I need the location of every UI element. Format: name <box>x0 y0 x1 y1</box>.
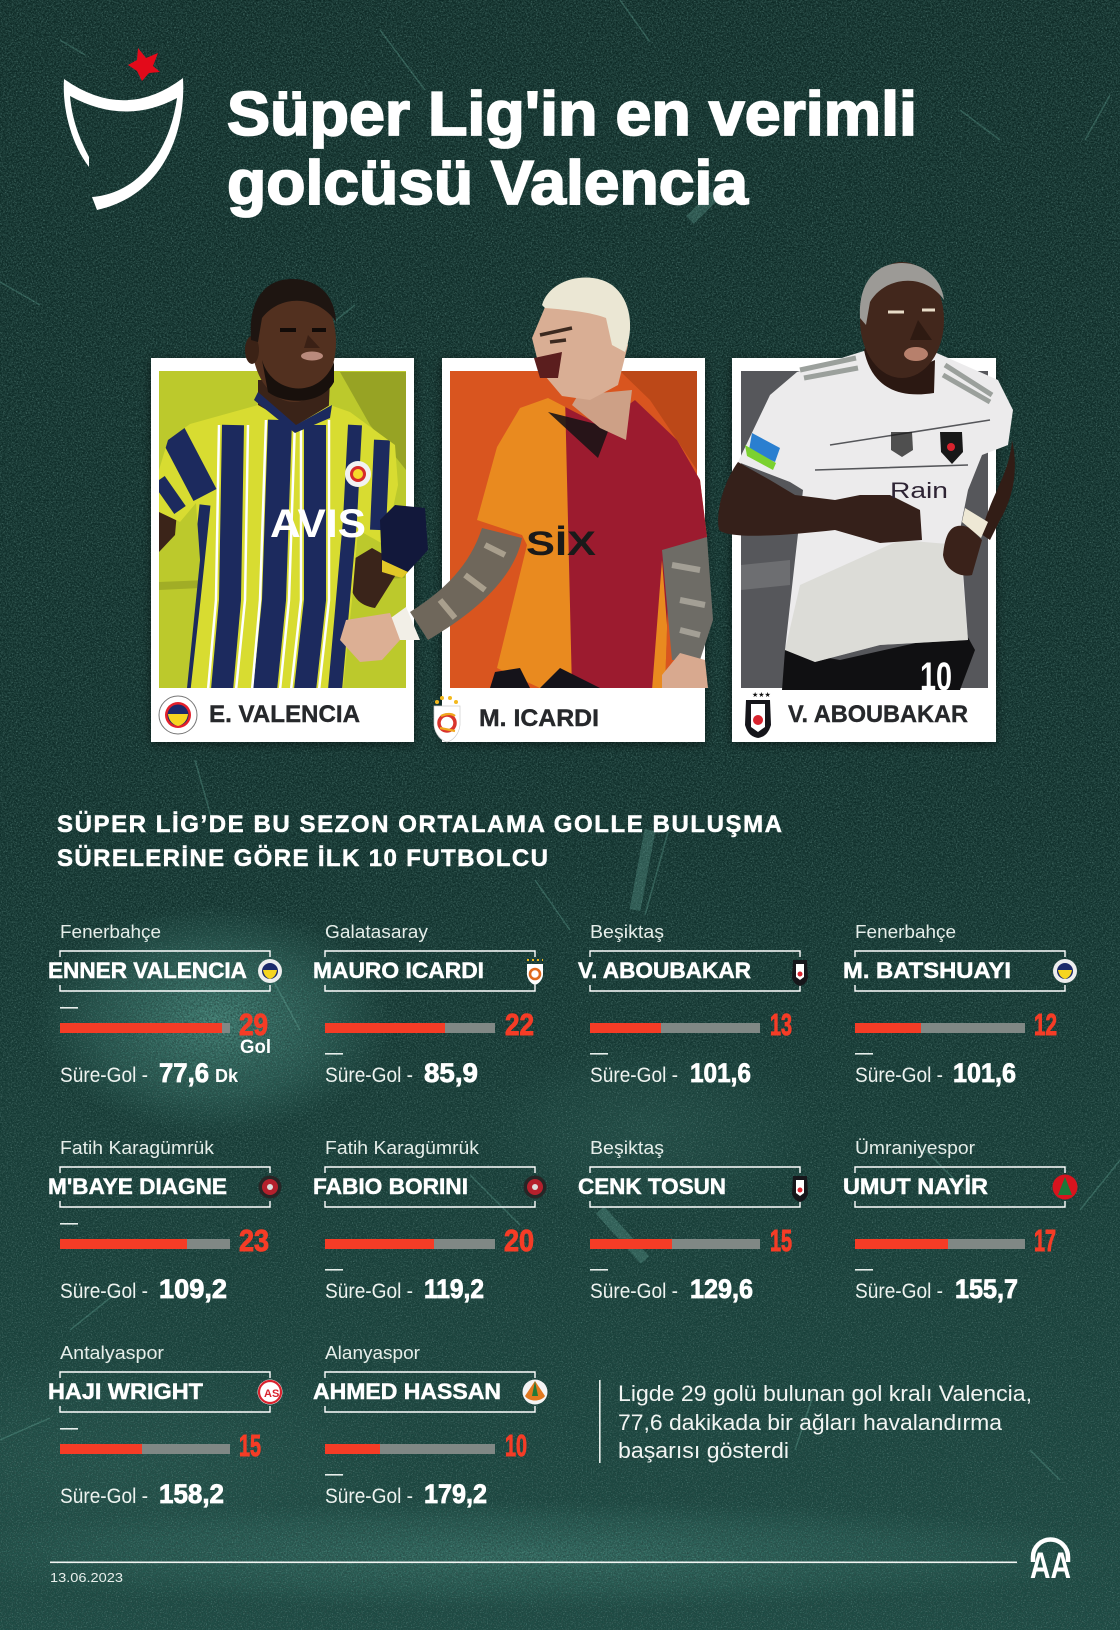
player card: Icardi: SİX <box>526 525 596 563</box>
player: Cenk Tosun <box>578 1138 808 1304</box>
icon: Aboubakar figure <box>718 262 1015 699</box>
player: Fabio Borini <box>313 1138 546 1304</box>
date: 13.06.2023 <box>50 1570 123 1585</box>
player: Enner Valencia: 29 <box>239 1007 268 1042</box>
title: golcüsü Valencia <box>227 149 749 218</box>
player card: Valencia <box>150 279 428 742</box>
player: Fabio Borini: 119,2 <box>424 1274 484 1304</box>
player: Enner Valencia: Süre-Gol - <box>60 1064 148 1087</box>
icon: AA logo <box>1030 1540 1071 1586</box>
icon: Aboubakar figure: 10 <box>920 655 952 699</box>
icon: Icardi head <box>572 390 632 440</box>
player: V. Aboubakar: 13 <box>770 1007 792 1042</box>
icon: Aboubakar head <box>860 262 944 378</box>
player: M. Batshuayi: M. BATSHUAYI <box>843 958 1011 983</box>
badge: Fenerbahçe <box>159 696 197 734</box>
icon: tattooed arm left <box>410 528 522 640</box>
player: Fabio Borini: Fatih Karagümrük <box>325 1138 480 1158</box>
player: M. Batshuayi: Fenerbahçe <box>855 922 956 942</box>
player: Umut Nayir: 17 <box>1034 1223 1056 1258</box>
player: Enner Valencia <box>48 922 282 1088</box>
player: Ahmed Hassan: 179,2 <box>424 1479 487 1509</box>
player: Umut Nayir: 155,7 <box>955 1274 1018 1304</box>
player: V. Aboubakar: Beşiktaş <box>590 922 664 942</box>
footer line <box>50 1562 1017 1563</box>
section heading <box>57 811 782 872</box>
callout: başarısı gösterdi <box>618 1438 789 1463</box>
player: M'Baye Diagne <box>48 1138 282 1304</box>
player: M. Batshuayi: Süre-Gol - <box>855 1064 943 1087</box>
player: Ahmed Hassan: Süre-Gol - <box>325 1485 413 1508</box>
player: M. Batshuayi <box>843 922 1077 1088</box>
player: Enner Valencia: Fenerbahçe <box>60 922 161 942</box>
player: Mauro Icardi: MAURO ICARDI <box>313 958 484 983</box>
player: Cenk Tosun: 15 <box>770 1223 792 1258</box>
icon: tattooed arm right <box>662 537 713 660</box>
icon: glove <box>380 505 428 575</box>
player: M. Batshuayi: 101,6 <box>953 1058 1016 1088</box>
label: E. VALENCIA <box>209 701 360 728</box>
player: Umut Nayir <box>843 1138 1078 1304</box>
callout <box>599 1380 1032 1463</box>
player: Mauro Icardi <box>313 922 543 1088</box>
player: Ahmed Hassan: 10 <box>505 1428 527 1463</box>
player: M. Batshuayi: 12 <box>1034 1007 1057 1042</box>
player: M'Baye Diagne: Fatih Karagümrük <box>60 1138 215 1158</box>
player: Cenk Tosun: Süre-Gol - <box>590 1280 678 1303</box>
badge: Beşiktaş <box>745 691 771 738</box>
player: Ahmed Hassan <box>313 1343 548 1509</box>
icon: Icardi shirt <box>470 395 715 690</box>
player: Haji Wright <box>48 1343 282 1509</box>
section heading: SÜPER LİG’DE BU SEZON ORTALAMA GOLLE BULUŞMA <box>57 811 782 838</box>
player: M'Baye Diagne: Süre-Gol - <box>60 1280 148 1303</box>
player: V. Aboubakar: V. ABOUBAKAR <box>578 958 751 983</box>
player: Fabio Borini: 20 <box>504 1223 534 1258</box>
player: Cenk Tosun: Beşiktaş <box>590 1138 664 1158</box>
icon: Valencia figure <box>150 279 428 690</box>
league logo <box>64 48 183 210</box>
player: Mauro Icardi: Galatasaray <box>325 922 428 942</box>
player: Fabio Borini: Süre-Gol - <box>325 1280 413 1303</box>
player: Enner Valencia: Dk <box>215 1066 239 1086</box>
badge: Galatasaray <box>434 696 460 742</box>
player: Cenk Tosun: CENK TOSUN <box>578 1174 726 1199</box>
player: Mauro Icardi: 22 <box>505 1007 534 1042</box>
player card: Icardi <box>340 278 715 742</box>
player: M'Baye Diagne: 23 <box>239 1223 269 1258</box>
player card: Aboubakar <box>718 262 1015 742</box>
player: Haji Wright: HAJI WRIGHT <box>48 1379 204 1404</box>
player: V. Aboubakar: 101,6 <box>690 1058 751 1088</box>
player: M'Baye Diagne: 109,2 <box>159 1274 227 1304</box>
section heading: SÜRELERİNE GÖRE İLK 10 FUTBOLCU <box>57 845 548 872</box>
player: Ahmed Hassan: Alanyaspor <box>325 1343 420 1363</box>
icon: AA logo: AA <box>1030 1545 1071 1586</box>
player: Enner Valencia: ENNER VALENCIA <box>48 958 247 983</box>
player: M'Baye Diagne: M'BAYE DIAGNE <box>48 1174 227 1199</box>
player: Haji Wright: Süre-Gol - <box>60 1485 148 1508</box>
player: Haji Wright: 15 <box>239 1428 261 1463</box>
callout: 77,6 dakikada bir ağları havalandırma <box>618 1410 1003 1435</box>
icon: Valencia head <box>252 282 336 402</box>
player: Cenk Tosun: 129,6 <box>690 1274 753 1304</box>
player: Enner Valencia: Gol <box>240 1037 271 1058</box>
player: Mauro Icardi: Süre-Gol - <box>325 1064 413 1087</box>
label: V. ABOUBAKAR <box>788 701 968 728</box>
player: Mauro Icardi: 85,9 <box>424 1058 478 1088</box>
player: Haji Wright: Antalyaspor <box>60 1343 164 1363</box>
icon: Aboubakar figure: Rain <box>890 478 948 503</box>
icon: arm left <box>718 462 922 543</box>
player: Haji Wright: AS <box>264 1388 279 1400</box>
player: Haji Wright: 158,2 <box>159 1479 224 1509</box>
player: Umut Nayir: UMUT NAYİR <box>843 1174 988 1199</box>
icon: Valencia figure: AVIS <box>270 502 366 546</box>
title <box>227 80 917 218</box>
player: Umut Nayir: Ümraniyespor <box>855 1138 975 1158</box>
player: V. Aboubakar <box>578 922 808 1088</box>
title: Süper Lig'in en verimli <box>227 80 917 149</box>
badge: Beşiktaş: ★★★ <box>752 691 771 699</box>
player: Ahmed Hassan: AHMED HASSAN <box>313 1379 501 1404</box>
player: V. Aboubakar: Süre-Gol - <box>590 1064 678 1087</box>
icon: arm right <box>975 440 1015 540</box>
player: Enner Valencia: 77,6 <box>159 1058 209 1088</box>
player: Fabio Borini: FABIO BORINI <box>313 1174 468 1199</box>
label: M. ICARDI <box>479 705 599 732</box>
player: Umut Nayir: Süre-Gol - <box>855 1280 943 1303</box>
callout: Ligde 29 golü bulunan gol kralı Valencia, <box>618 1381 1032 1406</box>
